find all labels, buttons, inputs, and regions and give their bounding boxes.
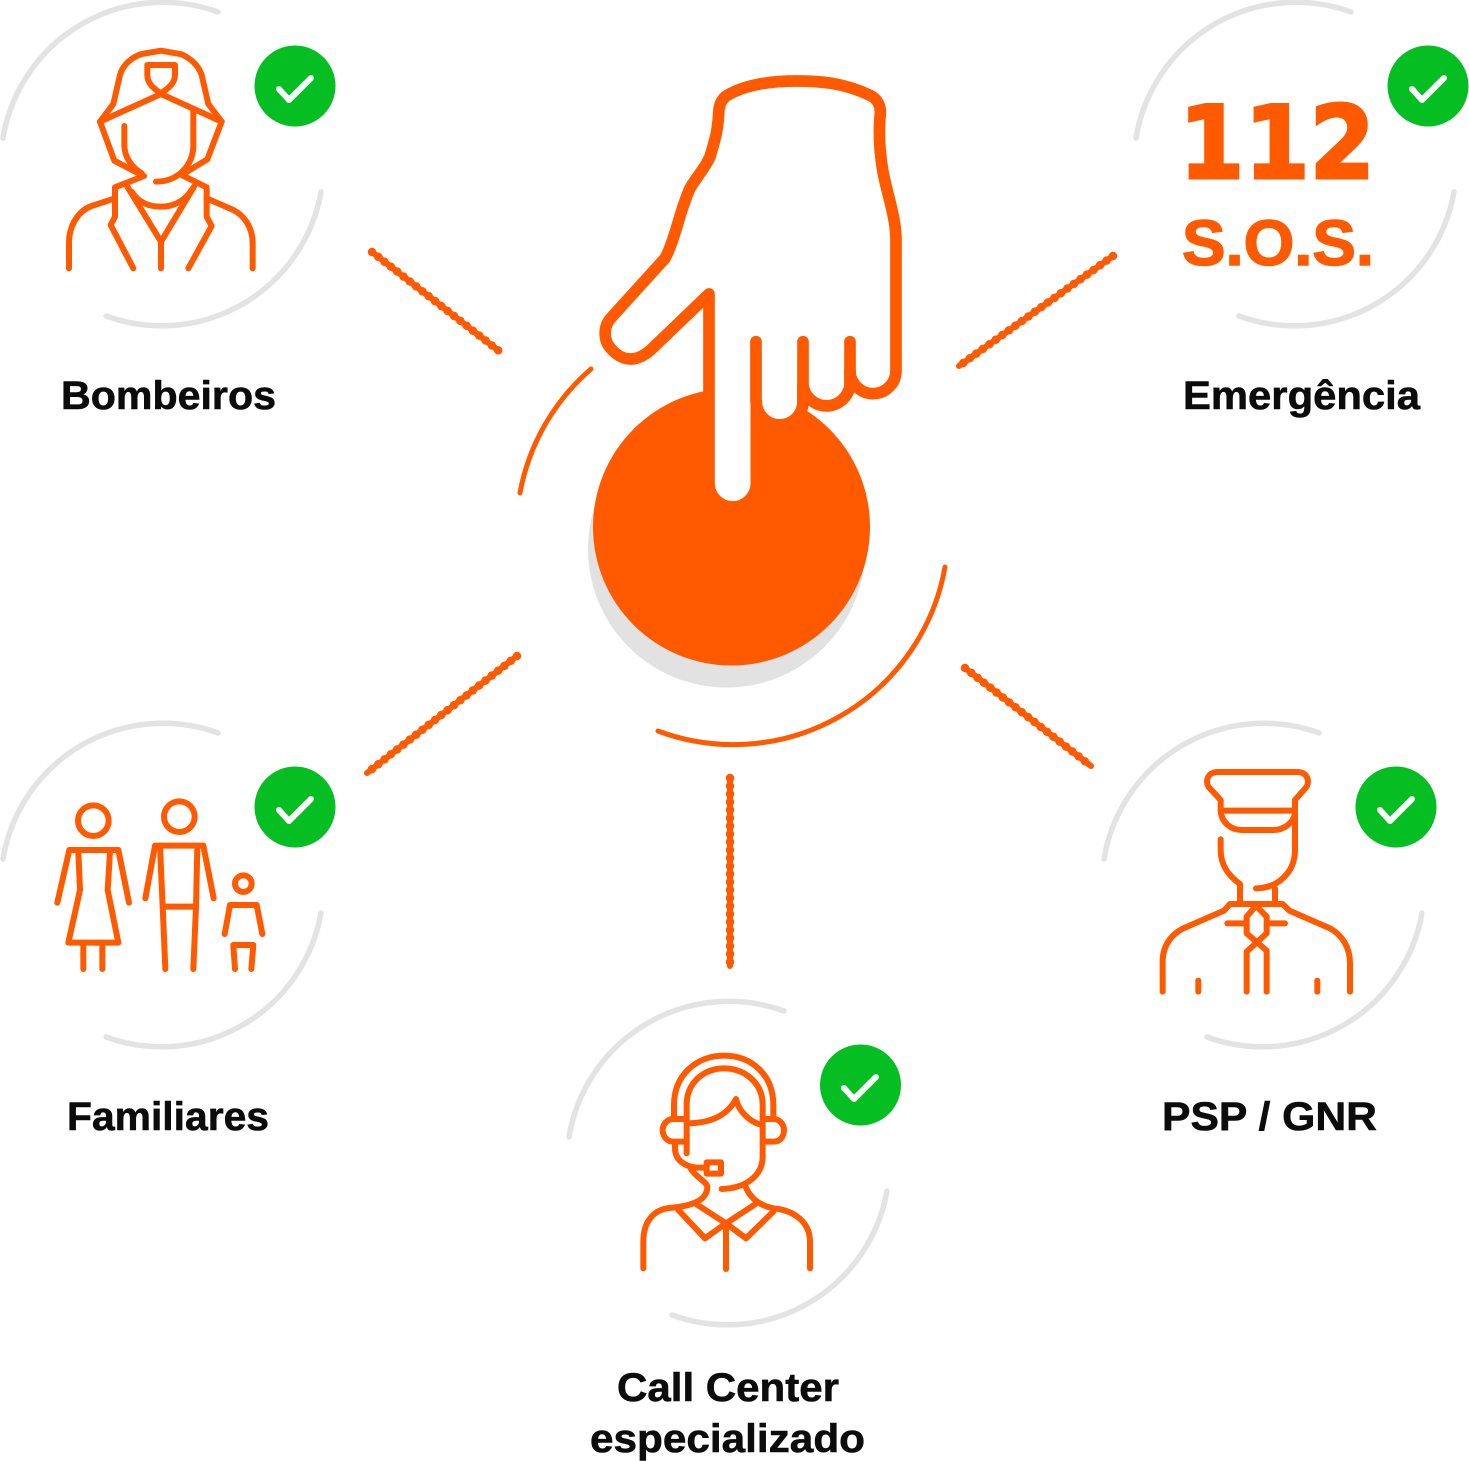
badge: check [1356,766,1436,848]
label: Call Center [617,1366,839,1410]
badge: check [254,766,336,848]
icon: police officer [1163,772,1350,992]
panel: Emergência [1136,2,1468,418]
text S.O.S.: S.O.S. [1182,207,1374,279]
badge: check [820,1044,901,1126]
ring arc upper left [520,369,591,493]
grey ring [3,2,321,326]
number 112: 112 [1179,84,1375,202]
icon: hand pressing button [605,81,896,507]
badge: check [254,46,336,126]
connector lines [367,252,1113,966]
grey ring [3,723,321,1047]
grey ring [1104,723,1422,1047]
panel: Bombeiros [3,2,336,418]
label: Bombeiros [61,374,276,418]
label: especializado [590,1417,865,1461]
panel: Familiares [3,723,336,1139]
label: Familiares [67,1095,269,1139]
ring arc lower right [658,567,945,745]
icon: firefighter [69,51,253,268]
button shadow [588,410,865,688]
icon: call center agent [643,1056,810,1269]
badge: check [1388,46,1468,126]
panel: Call Center especializado [569,1001,901,1461]
label [590,1366,865,1461]
central button with pressing hand [520,81,945,745]
grey ring [1136,2,1454,326]
label: Emergência [1183,374,1421,418]
label: PSP / GNR [1162,1095,1377,1139]
grey ring [569,1001,887,1325]
orange button [593,388,870,666]
icon: family [57,801,262,969]
panel: PSP / GNR [1104,723,1436,1139]
